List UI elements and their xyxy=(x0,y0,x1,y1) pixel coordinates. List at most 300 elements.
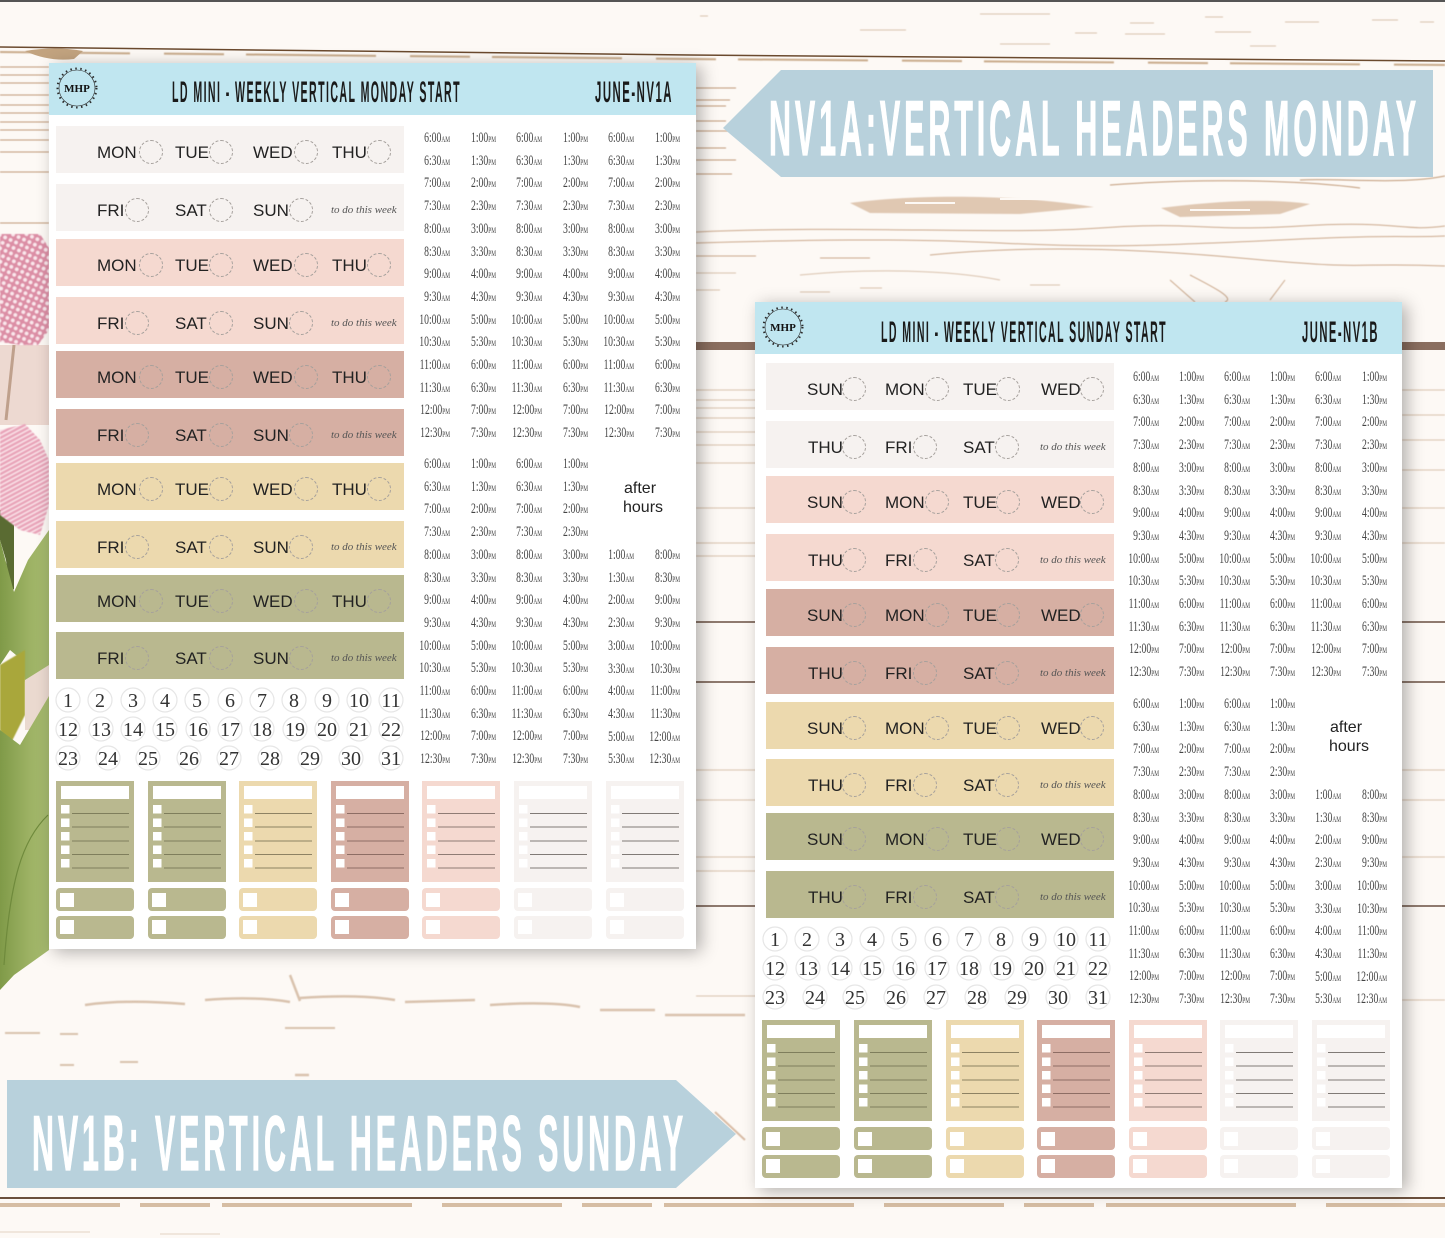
time stickers lower block: 5:30PM xyxy=(563,660,588,676)
time stickers upper block: 7:00AM xyxy=(1133,414,1159,430)
date number circles: 18 xyxy=(252,719,272,741)
time stickers lower block: 8:30AM xyxy=(1133,810,1159,826)
time stickers lower block: 11:00PM xyxy=(650,683,680,699)
time stickers lower block: 11:00AM xyxy=(1129,923,1159,939)
date number circles: 5 xyxy=(192,690,202,712)
header row white FRI-SUN: to do this week xyxy=(331,204,397,216)
time stickers upper block: 7:00PM xyxy=(471,402,496,418)
time stickers upper block: 1:30PM xyxy=(471,153,496,169)
header row rose SUN-WED: SUN xyxy=(807,606,843,625)
date number circles: 2 xyxy=(802,929,812,951)
time stickers lower block: 9:00AM xyxy=(1224,832,1250,848)
time stickers lower block: 11:30PM xyxy=(1357,946,1387,962)
header row sand THU-SAT: SAT xyxy=(963,776,995,795)
sand checklist xyxy=(946,1020,1024,1178)
time stickers upper block: 3:00PM xyxy=(1179,460,1204,476)
time stickers lower block: 12:30PM xyxy=(420,751,450,767)
olive checklist 2 xyxy=(148,781,226,939)
time stickers upper block: 8:30AM xyxy=(1133,483,1159,499)
time stickers upper block: 8:30AM xyxy=(1224,483,1250,499)
time stickers upper block: 7:00AM xyxy=(1224,414,1250,430)
header row blush THU-SAT xyxy=(766,534,1114,581)
time stickers lower block: 12:00PM xyxy=(512,728,542,744)
date number circles: 13 xyxy=(798,958,818,980)
time stickers lower block: 7:30AM xyxy=(516,524,542,540)
time stickers lower block: 6:30PM xyxy=(1270,946,1295,962)
time stickers upper block: 10:30AM xyxy=(1219,573,1250,589)
header row olive FRI-SUN: SUN xyxy=(253,649,289,668)
time stickers upper block: 2:00PM xyxy=(1179,414,1204,430)
time stickers upper block: 6:00AM xyxy=(1315,369,1341,385)
time stickers lower block: 2:30PM xyxy=(471,524,496,540)
time stickers upper block: 12:00PM xyxy=(604,402,634,418)
date number circles: 30 xyxy=(341,748,361,770)
time stickers lower block: 7:00PM xyxy=(471,728,496,744)
date number circles: 7 xyxy=(964,929,974,951)
header row rose MON-THU: WED xyxy=(253,368,293,387)
time stickers upper block: 3:00PM xyxy=(1270,460,1295,476)
time stickers lower block: 9:30AM xyxy=(1224,855,1250,871)
time stickers lower block: 11:00AM xyxy=(512,683,542,699)
time stickers lower block: 2:30PM xyxy=(1179,764,1204,780)
header row white THU-SAT xyxy=(766,421,1114,468)
time stickers upper block: 12:30PM xyxy=(1220,664,1250,680)
time stickers upper block: 10:00AM xyxy=(511,312,542,328)
time stickers lower block: 1:30PM xyxy=(471,479,496,495)
header row olive THU-SAT: FRI xyxy=(885,888,912,907)
time stickers upper block: 8:30AM xyxy=(424,244,450,260)
time stickers upper block: 4:00PM xyxy=(1270,505,1295,521)
header row rose FRI-SUN: to do this week xyxy=(331,429,397,441)
time stickers upper block: 4:30PM xyxy=(471,289,496,305)
time stickers upper block: 7:00PM xyxy=(1179,641,1204,657)
panel: sheet NV1A Monday start xyxy=(49,63,696,949)
date number circles: 10 xyxy=(349,690,369,712)
header row white FRI-SUN xyxy=(56,184,404,231)
time stickers upper block: 11:30AM xyxy=(1129,619,1159,635)
header row olive MON-THU: TUE xyxy=(175,592,209,611)
time stickers lower block: 11:30PM xyxy=(650,706,680,722)
time stickers upper block: 4:30PM xyxy=(1179,528,1204,544)
time stickers upper block: 6:30AM xyxy=(516,153,542,169)
header row blush MON-THU: MON xyxy=(97,256,137,275)
time stickers upper block: 2:30PM xyxy=(563,198,588,214)
date number circles: 31 xyxy=(1088,987,1108,1009)
time stickers upper block: 8:00AM xyxy=(1133,460,1159,476)
header row blush MON-THU xyxy=(56,239,404,286)
time stickers upper block: 11:30AM xyxy=(420,380,450,396)
time stickers upper block: 8:00AM xyxy=(516,221,542,237)
time stickers lower block: 1:00PM xyxy=(1270,696,1295,712)
header row rose MON-THU: TUE xyxy=(175,368,209,387)
time stickers upper block: 8:00AM xyxy=(608,221,634,237)
header row blush MON-THU: THU xyxy=(332,256,367,275)
time stickers upper block: 10:30AM xyxy=(603,334,634,350)
time stickers upper block: 12:30PM xyxy=(1129,664,1159,680)
time stickers lower block: 10:00PM xyxy=(650,638,680,654)
rose checklist xyxy=(1037,1020,1115,1178)
time stickers upper block: 6:30PM xyxy=(1270,619,1295,635)
time stickers lower block: 6:30PM xyxy=(471,706,496,722)
time stickers lower block: 2:00PM xyxy=(1270,741,1295,757)
date number circles: 8 xyxy=(289,690,299,712)
header row white THU-SAT: FRI xyxy=(885,438,912,457)
time stickers lower block: 5:00PM xyxy=(471,638,496,654)
time stickers lower block: 11:30AM xyxy=(420,706,450,722)
time stickers upper block: 6:30PM xyxy=(1362,619,1387,635)
time stickers lower block: 5:00PM xyxy=(563,638,588,654)
time stickers lower block: 5:30AM xyxy=(608,751,634,767)
header row rose FRI-SUN xyxy=(56,409,404,456)
date number circles xyxy=(762,926,1110,1010)
date number circles: 29 xyxy=(300,748,320,770)
time stickers upper block: 6:00PM xyxy=(1362,596,1387,612)
header row sand FRI-SUN: to do this week xyxy=(331,541,397,553)
time stickers upper block: 8:30AM xyxy=(516,244,542,260)
time stickers lower block: 7:30PM xyxy=(1270,991,1295,1007)
header row olive SUN-WED: WED xyxy=(1041,830,1081,849)
time stickers upper block: 1:00PM xyxy=(563,130,588,146)
time stickers upper block: 5:00PM xyxy=(563,312,588,328)
time stickers lower block: 5:00AM xyxy=(1315,969,1341,985)
header row olive MON-THU: THU xyxy=(332,592,367,611)
date number circles: 12 xyxy=(58,719,78,741)
header row white SUN-WED xyxy=(766,363,1114,410)
header row white FRI-SUN: SUN xyxy=(253,201,289,220)
header row blush FRI-SUN: FRI xyxy=(97,314,124,333)
header row rose SUN-WED: TUE xyxy=(963,606,997,625)
time stickers upper block: 2:00PM xyxy=(471,175,496,191)
time stickers lower block: 3:30AM xyxy=(608,661,634,677)
header row rose SUN-WED: MON xyxy=(885,606,925,625)
time stickers lower block: 6:30AM xyxy=(1133,719,1159,735)
date number circles: 14 xyxy=(123,719,143,741)
time stickers upper block: 11:00AM xyxy=(512,357,542,373)
time stickers lower block: 8:00AM xyxy=(1224,787,1250,803)
time stickers upper block: 2:30PM xyxy=(471,198,496,214)
time stickers upper block: 8:00AM xyxy=(1224,460,1250,476)
time stickers lower block: 2:00PM xyxy=(1179,741,1204,757)
flowers and leaves at left edge xyxy=(0,233,49,990)
date number circles: 17 xyxy=(220,719,240,741)
time stickers lower block: 4:00AM xyxy=(608,683,634,699)
time stickers lower block: 6:00PM xyxy=(563,683,588,699)
header row white THU-SAT: SAT xyxy=(963,438,995,457)
time stickers upper block: 7:30PM xyxy=(1362,664,1387,680)
header row rose FRI-SUN: FRI xyxy=(97,426,124,445)
header row olive THU-SAT xyxy=(766,871,1114,918)
time stickers upper block: 3:30PM xyxy=(563,244,588,260)
header row blush FRI-SUN: SUN xyxy=(253,314,289,333)
time stickers upper block: 4:30PM xyxy=(1270,528,1295,544)
time stickers lower block: 5:30AM xyxy=(1315,991,1341,1007)
header row olive MON-THU: MON xyxy=(97,592,137,611)
header row sand SUN-WED xyxy=(766,702,1114,749)
header row white THU-SAT: to do this week xyxy=(1040,441,1106,453)
header row blush FRI-SUN: to do this week xyxy=(331,317,397,329)
time stickers upper block: 1:30PM xyxy=(1362,392,1387,408)
time stickers upper block: 9:30AM xyxy=(1133,528,1159,544)
time stickers upper block: 7:30PM xyxy=(563,425,588,441)
date number circles: 22 xyxy=(1088,958,1108,980)
time stickers upper block: 7:30PM xyxy=(655,425,680,441)
time stickers upper block: 9:30AM xyxy=(1315,528,1341,544)
time stickers upper block: 11:30AM xyxy=(1220,619,1250,635)
time stickers lower block: 5:30PM xyxy=(1270,900,1295,916)
time stickers upper block: 7:00AM xyxy=(1315,414,1341,430)
header row olive THU-SAT: to do this week xyxy=(1040,891,1106,903)
time stickers lower block: 3:00PM xyxy=(563,547,588,563)
time stickers lower block: 5:30PM xyxy=(1179,900,1204,916)
time stickers lower block: 1:00PM xyxy=(1179,696,1204,712)
time stickers lower block: 12:30PM xyxy=(512,751,542,767)
header row white MON-THU: MON xyxy=(97,143,137,162)
time stickers upper block: 11:00AM xyxy=(1129,596,1159,612)
time stickers lower block: 1:00AM xyxy=(608,547,634,563)
time stickers upper block xyxy=(1128,369,1387,680)
time stickers lower block: 8:00AM xyxy=(1133,787,1159,803)
time stickers upper block: 6:30AM xyxy=(1315,392,1341,408)
time stickers upper block: 6:00AM xyxy=(1224,369,1250,385)
time stickers lower block: 4:30PM xyxy=(1179,855,1204,871)
olive checklist 1 xyxy=(762,1020,840,1178)
time stickers lower block: 4:00PM xyxy=(563,592,588,608)
date number circles: 21 xyxy=(349,719,369,741)
header row sand MON-THU xyxy=(56,463,404,510)
time stickers lower block: hours xyxy=(1329,738,1369,755)
time stickers lower block: 8:00AM xyxy=(516,547,542,563)
time stickers upper block: 5:30PM xyxy=(655,334,680,350)
date number circles: 20 xyxy=(317,719,337,741)
header row blush FRI-SUN xyxy=(56,297,404,344)
blush checklist xyxy=(422,781,500,939)
header row white SUN-WED: MON xyxy=(885,380,925,399)
date number circles: 31 xyxy=(381,748,401,770)
date number circles: 8 xyxy=(996,929,1006,951)
time stickers lower block: 7:00PM xyxy=(563,728,588,744)
time stickers lower block: 1:30AM xyxy=(608,570,634,586)
time stickers upper block: 10:00AM xyxy=(1219,551,1250,567)
time stickers upper block: 5:30PM xyxy=(1270,573,1295,589)
time stickers upper block: 3:30PM xyxy=(471,244,496,260)
date number circles: 18 xyxy=(959,958,979,980)
time stickers upper block: 4:30PM xyxy=(655,289,680,305)
time stickers lower block: 6:30AM xyxy=(1224,719,1250,735)
header row olive SUN-WED: SUN xyxy=(807,830,843,849)
time stickers lower block: 10:30AM xyxy=(419,660,450,676)
time stickers upper block: 8:30AM xyxy=(1315,483,1341,499)
header row rose FRI-SUN: SAT xyxy=(175,426,207,445)
time stickers upper block: 9:00AM xyxy=(516,266,542,282)
time stickers lower block: 7:00PM xyxy=(1270,968,1295,984)
time stickers upper block: 4:00PM xyxy=(655,266,680,282)
time stickers upper block: 4:00PM xyxy=(563,266,588,282)
time stickers lower block: 2:30AM xyxy=(1315,855,1341,871)
time stickers lower block: 4:00AM xyxy=(1315,923,1341,939)
time stickers lower block: 4:30PM xyxy=(471,615,496,631)
time stickers lower block: 7:00PM xyxy=(1179,968,1204,984)
time stickers upper block: 10:00AM xyxy=(419,312,450,328)
time stickers lower block: 12:00PM xyxy=(1129,968,1159,984)
time stickers upper block: 6:30AM xyxy=(1224,392,1250,408)
time stickers lower block: 11:00PM xyxy=(1357,923,1387,939)
time stickers lower block: 11:30AM xyxy=(1129,946,1159,962)
time stickers upper block: 8:00AM xyxy=(424,221,450,237)
time stickers lower block: 9:30PM xyxy=(1362,855,1387,871)
time stickers lower block: 11:00AM xyxy=(1220,923,1250,939)
header row blush SUN-WED: TUE xyxy=(963,493,997,512)
date number circles: 4 xyxy=(867,929,877,951)
header row sand MON-THU: MON xyxy=(97,480,137,499)
header row sand SUN-WED: SUN xyxy=(807,719,843,738)
date number circles xyxy=(56,688,404,770)
time stickers lower block: 10:30AM xyxy=(1128,900,1159,916)
time stickers upper block: 6:00PM xyxy=(1179,596,1204,612)
time stickers lower block: 12:30PM xyxy=(1129,991,1159,1007)
time stickers lower block: 11:00AM xyxy=(420,683,450,699)
time stickers lower block: 11:30AM xyxy=(512,706,542,722)
date number circles: 2 xyxy=(95,690,105,712)
time stickers upper block: 7:00PM xyxy=(1362,641,1387,657)
time stickers lower block: 9:30AM xyxy=(516,615,542,631)
time stickers lower block: 10:00PM xyxy=(1357,878,1387,894)
time stickers upper block: 10:00AM xyxy=(1128,551,1159,567)
time stickers upper block: 5:00PM xyxy=(471,312,496,328)
time stickers lower block: 7:00AM xyxy=(1133,741,1159,757)
date number circles: 19 xyxy=(992,958,1012,980)
header row white FRI-SUN: SAT xyxy=(175,201,207,220)
header row blush SUN-WED xyxy=(766,476,1114,523)
time stickers upper block: 9:00AM xyxy=(1315,505,1341,521)
time stickers upper block: 4:00PM xyxy=(471,266,496,282)
date number circles: 23 xyxy=(765,987,785,1009)
time stickers lower block: 1:00AM xyxy=(1315,787,1341,803)
time stickers lower block: 12:00AM xyxy=(649,729,680,745)
time stickers upper block: 1:30PM xyxy=(655,153,680,169)
time stickers upper block: 2:30PM xyxy=(1179,437,1204,453)
header row sand FRI-SUN: SUN xyxy=(253,538,289,557)
time stickers lower block: 10:00AM xyxy=(419,638,450,654)
time stickers upper block: 1:00PM xyxy=(1179,369,1204,385)
time stickers upper block: 3:00PM xyxy=(655,221,680,237)
time stickers lower block: 1:30PM xyxy=(1270,719,1295,735)
time stickers upper block: 6:00PM xyxy=(1270,596,1295,612)
header row white MON-THU xyxy=(56,126,404,173)
date number circles: 22 xyxy=(381,719,401,741)
header row sand THU-SAT: FRI xyxy=(885,776,912,795)
olive checklist 2 xyxy=(854,1020,932,1178)
header row blush THU-SAT: SAT xyxy=(963,551,995,570)
header row white MON-THU: THU xyxy=(332,143,367,162)
time stickers lower block: 8:00AM xyxy=(424,547,450,563)
header row sand SUN-WED: WED xyxy=(1041,719,1081,738)
date number circles: 27 xyxy=(219,748,239,770)
time stickers lower block: after xyxy=(624,480,656,497)
date number circles: 28 xyxy=(967,987,987,1009)
time stickers lower block: 8:30AM xyxy=(424,570,450,586)
header row blush MON-THU: TUE xyxy=(175,256,209,275)
time stickers lower block: 7:30PM xyxy=(1179,991,1204,1007)
time stickers lower block: 6:00PM xyxy=(1179,923,1204,939)
header row blush THU-SAT: THU xyxy=(808,551,843,570)
white checklist 2 xyxy=(606,781,684,939)
date number circles: 21 xyxy=(1056,958,1076,980)
sand checklist xyxy=(239,781,317,939)
time stickers upper block: 7:00AM xyxy=(424,175,450,191)
time stickers upper block: 5:00PM xyxy=(1179,551,1204,567)
panel: sheet NV1B Sunday start xyxy=(755,302,1402,1188)
white checklist 1 xyxy=(1220,1020,1298,1178)
time stickers lower block: 7:30PM xyxy=(563,751,588,767)
time stickers lower block: 5:00PM xyxy=(1270,878,1295,894)
time stickers lower block: 12:00PM xyxy=(1220,968,1250,984)
time stickers lower block: 7:30AM xyxy=(1133,764,1159,780)
time stickers lower block: 5:30PM xyxy=(471,660,496,676)
olive checklist 1 xyxy=(56,781,134,939)
header row white MON-THU: TUE xyxy=(175,143,209,162)
header row olive THU-SAT: SAT xyxy=(963,888,995,907)
header row blush MON-THU: WED xyxy=(253,256,293,275)
time stickers upper block: 7:00AM xyxy=(608,175,634,191)
time stickers lower block: 8:30AM xyxy=(1224,810,1250,826)
date number circles: 1 xyxy=(770,929,780,951)
time stickers upper block: 7:00AM xyxy=(516,175,542,191)
time stickers lower block: 2:00AM xyxy=(608,592,634,608)
time stickers upper block: 5:00PM xyxy=(655,312,680,328)
time stickers lower block: 6:00AM xyxy=(424,456,450,472)
time stickers upper block: 7:30AM xyxy=(516,198,542,214)
date number circles: 23 xyxy=(58,748,78,770)
time stickers lower block: 3:00PM xyxy=(1179,787,1204,803)
date number circles: 15 xyxy=(155,719,175,741)
time stickers upper block: 10:30AM xyxy=(1310,573,1341,589)
header row sand SUN-WED: MON xyxy=(885,719,925,738)
blush checklist xyxy=(1129,1020,1207,1178)
header row sand MON-THU: TUE xyxy=(175,480,209,499)
time stickers upper block: 6:00AM xyxy=(1133,369,1159,385)
header row white THU-SAT: THU xyxy=(808,438,843,457)
time stickers lower block: 10:00AM xyxy=(511,638,542,654)
time stickers upper block: 10:30AM xyxy=(511,334,542,350)
time stickers upper block: 6:30PM xyxy=(1179,619,1204,635)
time stickers upper block: 6:00PM xyxy=(563,357,588,373)
time stickers upper block: 6:00AM xyxy=(516,130,542,146)
time stickers upper block: 10:00AM xyxy=(603,312,634,328)
time stickers lower block: 3:30PM xyxy=(563,570,588,586)
time stickers lower block: 2:30PM xyxy=(1270,764,1295,780)
time stickers upper block: 1:00PM xyxy=(471,130,496,146)
time stickers lower block: 1:30PM xyxy=(563,479,588,495)
time stickers lower block: 4:30PM xyxy=(1270,855,1295,871)
time stickers upper block: 5:00PM xyxy=(1362,551,1387,567)
time stickers upper block: 9:30AM xyxy=(608,289,634,305)
header row blush THU-SAT: FRI xyxy=(885,551,912,570)
time stickers lower block: 12:30AM xyxy=(1356,991,1387,1007)
date number circles: 15 xyxy=(862,958,882,980)
time stickers lower block: 9:00PM xyxy=(1362,832,1387,848)
rose checklist xyxy=(331,781,409,939)
time stickers upper block: 12:30PM xyxy=(604,425,634,441)
time stickers upper block: 12:30PM xyxy=(1311,664,1341,680)
header row olive FRI-SUN: to do this week xyxy=(331,652,397,664)
time stickers upper block: 1:00PM xyxy=(1270,369,1295,385)
time stickers upper block: 6:30PM xyxy=(655,380,680,396)
date number circles: 24 xyxy=(98,748,118,770)
time stickers lower block: 10:00AM xyxy=(1219,878,1250,894)
time stickers lower block: 4:00PM xyxy=(471,592,496,608)
time stickers lower block: 8:00PM xyxy=(1362,787,1387,803)
time stickers upper block: 6:00PM xyxy=(471,357,496,373)
